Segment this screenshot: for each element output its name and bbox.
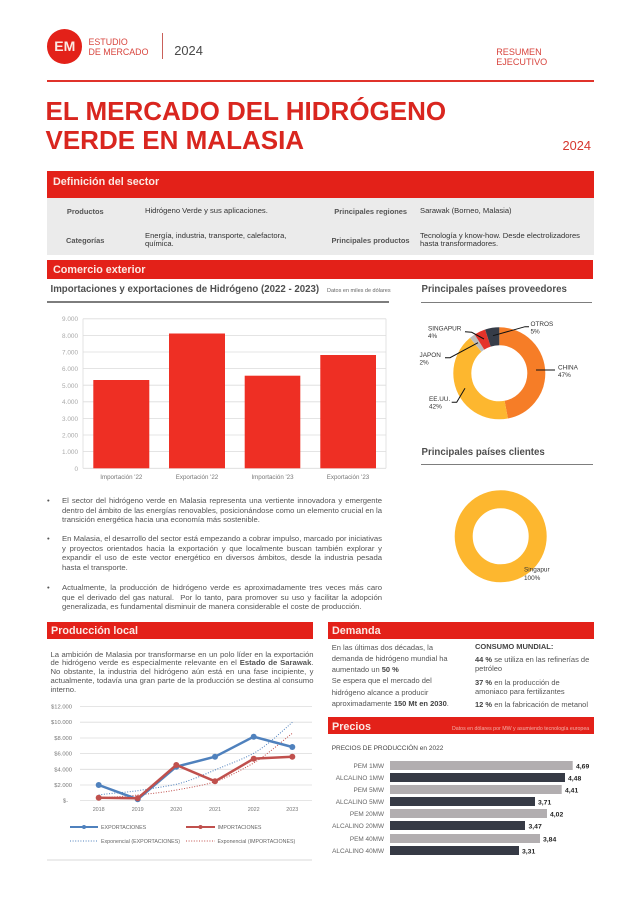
bar chart: importaciones y exportaciones: Importación '23: [251, 474, 294, 481]
text block: producción: interno.: [50, 685, 76, 694]
bar chart: importaciones y exportaciones: Exportación '22: [176, 474, 219, 481]
bar chart: importaciones y exportaciones: 2.000: [62, 432, 78, 440]
line chart: producción: $4.000: [54, 767, 72, 773]
text block: demanda: aumentado un 50 %: [332, 665, 399, 674]
line chart: producción: $-: [63, 798, 68, 804]
bullet 3: [47, 583, 382, 611]
bullet 2: expandir el uso de este vector energético en diversos ámbitos, desde la industria pesada: [62, 553, 382, 562]
bar chart: importaciones y exportaciones: 5.000: [62, 383, 78, 390]
bar chart: precios: ALCALINO 5MW: [336, 799, 385, 806]
heading: precios: Precios: [332, 721, 371, 733]
label: productos: Productos: [67, 207, 104, 216]
donut chart: proveedores: SINGAPUR: [428, 326, 462, 332]
header rule: [47, 80, 594, 82]
bar chart: precios: 4,02: [550, 811, 563, 818]
bullet 3: •: [47, 583, 50, 592]
value: categorías: Energía, industria, transporte, calefactora, química.: [145, 231, 286, 248]
header logo: [47, 29, 163, 64]
bar chart: precios: PEM 5MW: [353, 787, 385, 794]
text block: producción: La ambición de Malasia por transformarse en un polo líder en la exportación: [50, 650, 314, 658]
rule under clientes: [421, 464, 593, 465]
text block: producción: actualmente, todavía una gran parte de la producción se destina al consumo: [50, 676, 314, 685]
donut chart: proveedores: 47%: [558, 372, 571, 379]
bar chart: importaciones y exportaciones: 6.000: [62, 366, 78, 373]
heading: demanda: [328, 622, 594, 639]
line chart: producción: 2023: [286, 807, 298, 813]
text block: demanda: En las últimas dos décadas, la: [332, 643, 433, 652]
line chart: producción: $12.000: [51, 704, 72, 710]
icon: EM circle: [47, 29, 82, 64]
text block: demanda: Se espera que el mercado del: [332, 676, 432, 685]
text block: producción: No obstante, la industria del hidrógeno aún está en una fase incipiente, y: [50, 667, 314, 676]
bar chart: importaciones y exportaciones: [62, 316, 386, 481]
text block: demanda: [332, 643, 449, 708]
donut chart: proveedores: OTROS: [530, 321, 553, 328]
text block: producción: [50, 650, 314, 694]
line chart: producción: Exponencial (IMPORTACIONES): [218, 839, 296, 845]
panel: definición del sector: [47, 171, 594, 254]
bullet 3: que el derivado del gas natural. Por lo tanto, para promover su uso y facilitar la adopción: [62, 593, 382, 602]
line chart: producción: 2018: [93, 807, 105, 813]
bullet 3: Actualmente, la producción de hidrógeno verde es aproximadamente tres veces más caro: [62, 583, 382, 592]
rule under importaciones: [47, 301, 389, 302]
title: VERDE EN MALASIA: [46, 125, 304, 155]
text block: bullets comercio: [47, 496, 382, 611]
line chart: producción: $10.000: [51, 720, 72, 726]
subheading: proveedores: Principales países proveedores: [422, 284, 567, 295]
rule under proveedores: [421, 302, 592, 303]
donut chart: proveedores: CHINA: [558, 364, 579, 372]
bar chart: precios: PEM 1MW: [353, 763, 385, 770]
bar chart: precios: 4,41: [565, 787, 578, 794]
bar chart: importaciones y exportaciones: 1.000: [62, 449, 78, 456]
heading: definición: Definición del sector: [53, 176, 159, 188]
donut chart: proveedores: 4%: [428, 333, 438, 340]
donut chart: proveedores: 5%: [530, 328, 540, 336]
consumo 37: [475, 678, 565, 696]
text block: demanda: demanda de hidrógeno mundial ha: [332, 654, 448, 663]
consumo 37: amoniaco para fertilizantes: [475, 687, 565, 696]
bar chart: importaciones y exportaciones: 7.000: [62, 350, 78, 356]
label: regiones: Principales regiones: [334, 207, 407, 216]
text block: producción: de hidrógeno verde es especialmente relevante en el Estado de Sarawak.: [50, 658, 314, 667]
line chart: producción: 2021: [209, 807, 221, 813]
report type: RESUMEN: [496, 46, 542, 56]
subheading: clientes: Principales países clientes: [422, 447, 545, 458]
bullet 1: transición energética hacia una economía más sostenible.: [62, 515, 260, 524]
heading: producción local: [47, 622, 313, 639]
bar chart: precios: 4,48: [568, 775, 581, 782]
donut chart: proveedores: [420, 321, 579, 420]
bar chart: importaciones y exportaciones: Exportación '23: [327, 474, 370, 481]
bar chart: precios: 4,69: [576, 763, 589, 770]
bar chart: precios: ALCALINO 40MW: [332, 848, 385, 855]
consumo 37: 37 % en la producción de: [475, 678, 560, 687]
consumo 44: 44 % se utiliza en las refinerías de: [475, 655, 589, 664]
donut chart: clientes: 100%: [524, 575, 541, 582]
bar chart: precios: ALCALINO 1MW: [336, 775, 385, 782]
line chart: producción: Exponencial (EXPORTACIONES): [101, 839, 180, 845]
donut chart: proveedores: JAPON: [420, 352, 441, 359]
bullet 2: En Malasia, el desarrollo del sector está empezando a cobrar impulso, marcado por iniciativas: [62, 534, 382, 543]
subheading: importaciones y exportaciones: Importaciones y exportaciones de Hidrógeno (2022 - 2023): [50, 284, 319, 295]
icon: EM circle: EM: [54, 38, 75, 54]
bar chart: precios: 3,47: [528, 823, 542, 830]
bar chart: importaciones y exportaciones: 8.000: [62, 333, 78, 340]
line chart: producción: $6.000: [54, 752, 72, 758]
heading: comercio exterior: [47, 260, 593, 279]
donut chart: clientes: Singapur: [524, 566, 550, 574]
title: [46, 96, 446, 155]
chart title: precios: PRECIOS DE PRODUCCIÓN en 2022: [332, 745, 443, 752]
donut chart: proveedores: 42%: [429, 404, 442, 410]
heading: comercio exterior: Comercio exterior: [53, 264, 145, 276]
brand name: ESTUDIO: [88, 37, 128, 47]
report type: [496, 46, 547, 67]
line chart: producción: $8.000: [54, 736, 72, 742]
bullet 1: El sector del hidrógeno verde en Malasia representa una vertiente innovadora y emergente: [62, 496, 382, 505]
heading: demanda: Demanda: [332, 625, 381, 637]
line chart: producción: 2022: [248, 807, 260, 813]
bar chart: precios: PEM 40MW: [350, 836, 385, 843]
consumo 12: 12 % en la fabricación de metanol: [475, 700, 588, 709]
bar chart: importaciones y exportaciones: 0: [74, 466, 78, 473]
line chart: producción: IMPORTACIONES: [218, 825, 262, 831]
header year: 2024: [174, 43, 203, 58]
heading: producción local: Producción local: [51, 625, 138, 637]
value: productos: Hidrógeno Verde y sus aplicaciones.: [145, 206, 268, 214]
bar chart: precios: 3,31: [522, 848, 535, 855]
bar chart: importaciones y exportaciones: 3.000: [62, 416, 78, 423]
consumo 44: [475, 655, 589, 673]
title year: 2024: [562, 138, 591, 153]
heading: definición: [47, 171, 594, 198]
consumo 44: petróleo: [475, 664, 502, 673]
bullet 2: hasta el transporte.: [62, 563, 128, 572]
line chart: producción: EXPORTACIONES: [101, 825, 147, 831]
label: productos principales: Principales productos: [331, 236, 410, 244]
bar chart: importaciones y exportaciones: 4.000: [62, 399, 78, 406]
bar chart: importaciones y exportaciones: 9.000: [62, 316, 78, 323]
label: categorías: Categorías: [66, 236, 104, 244]
vertical separator: [162, 33, 163, 59]
consumo heading: CONSUMO MUNDIAL:: [475, 642, 553, 651]
note: unidades: Datos en miles de dólares: [327, 288, 391, 294]
value: productos principales: Tecnología y know-how. Desde electrolizadores hasta transformadores.: [420, 231, 580, 248]
brand name: [88, 37, 148, 57]
bar chart: precios: 3,84: [543, 836, 556, 843]
bar chart: precios: PEM 20MW: [350, 811, 385, 818]
text block: demanda: hidrógeno alcance a producir: [332, 688, 428, 696]
heading: precios: [328, 717, 594, 734]
text block: demanda: aproximadamente 150 Mt en 2030.: [332, 699, 449, 708]
value: regiones: Sarawak (Borneo, Malasia): [420, 206, 512, 214]
bullet 1: dentro del ámbito de las energías renovables, posicionándose como un elemento crucial en la: [62, 506, 382, 515]
report type: EJECUTIVO: [496, 57, 547, 67]
bullet 1: •: [47, 496, 50, 505]
line chart: producción: 2019: [132, 807, 144, 813]
donut chart: proveedores: 2%: [420, 360, 429, 366]
bullet 2: y proyectos orientados hacia la exportación y que localmente buscan también explorar y: [62, 544, 382, 553]
bullet 1: [47, 496, 382, 524]
title: EL MERCADO DEL HIDRÓGENO: [46, 96, 446, 126]
bar chart: precios: ALCALINO 20MW: [332, 823, 385, 830]
brand name: DE MERCADO: [88, 47, 148, 57]
bullet 2: [47, 534, 382, 572]
line chart: producción: 2020: [170, 807, 182, 813]
bar chart: importaciones y exportaciones: Importación '22: [100, 474, 143, 481]
text block: consumo mundial: [475, 642, 589, 709]
donut chart: clientes: [454, 490, 550, 582]
bullet 2: •: [47, 534, 50, 543]
bullet 3: generalizada, es fundamental disminuir de manera considerable el coste de producción.: [62, 602, 362, 611]
line chart: producción: $2.000: [54, 783, 72, 789]
note: precios: Datos en dólares por MW y asumiendo tecnología europea: [452, 726, 589, 732]
donut chart: proveedores: EE.UU.: [429, 396, 451, 403]
bar chart: precios: 3,71: [538, 799, 551, 806]
